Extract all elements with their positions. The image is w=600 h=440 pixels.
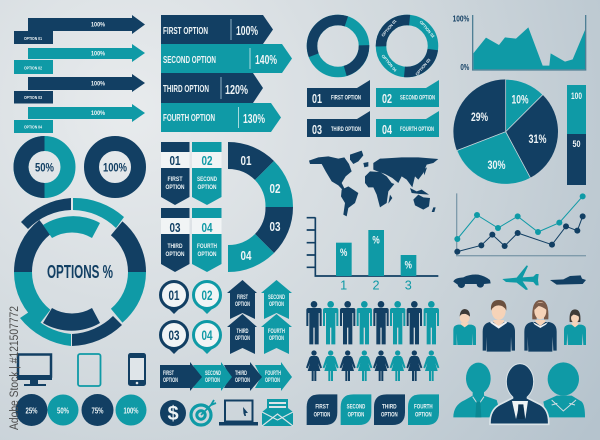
icon: phone xyxy=(128,353,146,386)
area chart: 100% xyxy=(453,14,469,23)
row of men xyxy=(306,301,439,344)
ring chart: with option labels: OPTION 02 xyxy=(419,19,436,39)
second option bar xyxy=(161,44,292,73)
first option bar: FIRST OPTION xyxy=(163,26,208,37)
icon: target xyxy=(191,400,216,425)
upward arrow banners: SECOND xyxy=(268,295,285,301)
arrow option 4: 100% xyxy=(91,111,106,117)
people pictograms xyxy=(306,300,586,425)
tag 04: OPTION xyxy=(198,251,217,258)
leaf labels: OPTION xyxy=(314,411,330,418)
flag labels 01-04 xyxy=(307,80,439,137)
upward arrow banners: FIRST xyxy=(237,295,248,301)
upward arrow banners: OPTION xyxy=(269,302,284,308)
numbered bookmark tags xyxy=(161,142,222,272)
portrait: woman xyxy=(524,300,557,352)
flag labels 01-04: 03 xyxy=(312,122,322,137)
tag 03: 03 xyxy=(170,220,180,235)
leaf labels: FIRST xyxy=(315,403,329,410)
tag 02: SECOND xyxy=(197,176,217,183)
vertical stacked bar xyxy=(567,85,586,185)
arrow option 4: OPTION 04 xyxy=(24,124,42,130)
vertical stacked bar: 100 xyxy=(571,91,582,101)
half ring segments 01-04 xyxy=(228,142,293,272)
fourth option bar: 130% xyxy=(243,111,265,126)
bar chart: % xyxy=(340,247,347,259)
third option bar xyxy=(161,73,263,103)
tag 01 xyxy=(161,142,190,205)
donut: 50%: 50% xyxy=(35,160,54,174)
ring chart: with option labels xyxy=(380,18,436,77)
chevron process row: OPTION xyxy=(265,378,280,384)
icon: boat xyxy=(550,275,586,285)
panel: arrow options xyxy=(14,15,145,133)
pie chart: 31% xyxy=(528,132,547,146)
icon: dollar xyxy=(160,400,186,426)
watermark: stock id: Adobe Stock | #121507772 xyxy=(9,306,21,430)
half ring segments 01-04: 03 xyxy=(270,219,280,234)
ring title: OPTIONS % xyxy=(47,262,113,282)
large options ring chart xyxy=(14,198,146,346)
percent circles: 25% xyxy=(26,406,38,416)
pie chart: 29% xyxy=(471,110,488,124)
icon: tablet xyxy=(78,354,100,386)
tag 02: 02 xyxy=(202,153,212,168)
arrow option 3: 100% xyxy=(91,82,106,88)
icon: airplane xyxy=(502,265,539,290)
portrait: boy xyxy=(453,309,476,345)
map pins 01-04: 03 xyxy=(168,327,180,343)
pie chart: 30% xyxy=(488,158,506,172)
donut: 100%: 100% xyxy=(103,160,127,174)
silhouette: woman right xyxy=(543,362,585,417)
upward arrow banners: OPTION xyxy=(235,302,250,308)
upward arrow banners: OPTION xyxy=(269,336,284,342)
donut: 50% xyxy=(13,136,68,198)
flag labels 01-04: THIRD OPTION xyxy=(331,127,361,133)
first option bar: 100% xyxy=(236,23,258,38)
ring chart: with option labels: OPTION 01 xyxy=(380,18,398,38)
map pins 01-04: 01 xyxy=(168,287,180,303)
chevron process row xyxy=(160,362,292,391)
flag labels 01-04: FOURTH OPTION xyxy=(400,127,434,133)
second option bar: 140% xyxy=(255,52,277,67)
tag 01: OPTION xyxy=(166,184,185,191)
icon: laptop xyxy=(219,400,258,426)
map pins 01-04: 02 xyxy=(202,287,213,303)
second option bar: SECOND OPTION xyxy=(163,55,216,66)
upward arrow banners: OPTION xyxy=(235,336,250,342)
third option bar: THIRD OPTION xyxy=(163,84,209,95)
chevron process row: THIRD xyxy=(235,371,247,377)
chevron process row: OPTION xyxy=(163,378,178,384)
upward arrow banners: FOURTH xyxy=(268,329,285,335)
tag 01: FIRST xyxy=(168,176,183,183)
bar chart: 2 xyxy=(372,278,380,292)
tag 03 xyxy=(161,208,190,272)
chevron process row: FOURTH xyxy=(265,371,281,377)
portrait: man xyxy=(483,300,515,352)
chevron process row: OPTION xyxy=(235,378,250,384)
icon: desktop monitor xyxy=(17,354,52,386)
portrait: girl xyxy=(564,309,586,345)
tag 04: FOURTH xyxy=(197,243,217,250)
bar chart xyxy=(307,217,438,292)
half ring segments 01-04: 04 xyxy=(240,248,252,263)
leaf labels: OPTION xyxy=(381,411,398,418)
leaf labels: OPTION xyxy=(348,411,364,418)
percent circles: 50% xyxy=(57,406,69,416)
arrow option 3: OPTION 03 xyxy=(24,95,42,100)
vertical stacked bar: 50 xyxy=(572,139,580,149)
pie chart: 10% xyxy=(512,92,529,106)
leaf labels: SECOND xyxy=(347,403,365,410)
row of women xyxy=(306,350,439,381)
bar chart: % xyxy=(405,259,412,271)
arrow option 2 xyxy=(14,44,145,74)
ring chart: with option labels: OPTION 03 xyxy=(414,57,432,77)
flag labels 01-04: 04 xyxy=(382,122,393,137)
third option bar: 120% xyxy=(225,82,248,97)
pie chart xyxy=(453,79,558,184)
bar chart: 3 xyxy=(405,278,412,292)
world map xyxy=(309,151,438,216)
icon: dollar: $ xyxy=(167,403,179,425)
ring chart: plain xyxy=(312,20,364,72)
arrow option 1: 100% xyxy=(91,22,106,28)
half ring segments 01-04: 02 xyxy=(270,181,280,196)
silhouette: man left xyxy=(453,363,502,417)
percent circles xyxy=(16,394,146,426)
bar chart: % xyxy=(372,235,380,247)
tag 01: 01 xyxy=(170,153,180,168)
chevron process row: SECOND xyxy=(205,371,221,377)
icon: car xyxy=(453,275,491,288)
arrow option 1 xyxy=(14,15,145,44)
tag 03: OPTION xyxy=(166,251,185,258)
half ring segments 01-04: 01 xyxy=(240,153,252,168)
area chart: 0% xyxy=(460,63,469,72)
line chart xyxy=(454,193,586,256)
tag 02 xyxy=(192,142,222,205)
panel: percentage option bars xyxy=(161,15,292,132)
flag labels 01-04: SECOND OPTION xyxy=(400,96,435,102)
leaf labels xyxy=(307,394,439,425)
business silhouettes xyxy=(453,362,585,424)
flag labels 01-04: 01 xyxy=(312,91,322,106)
leaf labels: OPTION xyxy=(415,411,432,418)
ring chart: with option labels: OPTION 04 xyxy=(381,53,398,73)
leaf labels: FOURTH xyxy=(414,403,433,410)
upward arrow banners: THIRD xyxy=(236,329,249,335)
percent circles: 100% xyxy=(124,406,138,416)
tag 04: 04 xyxy=(202,220,213,235)
fourth option bar xyxy=(161,103,281,132)
donut: 100% xyxy=(92,144,138,190)
arrow option 1: OPTION 01 xyxy=(24,36,42,41)
tag 03: THIRD xyxy=(168,243,183,250)
bar chart: 1 xyxy=(340,278,347,292)
silhouette: man centre xyxy=(490,364,549,424)
first option bar xyxy=(161,15,273,44)
tag 02: OPTION xyxy=(198,184,217,191)
arrow option 3 xyxy=(14,74,145,104)
chevron process row: FIRST xyxy=(163,371,174,377)
area chart xyxy=(453,14,586,72)
fourth option bar: FOURTH OPTION xyxy=(163,113,215,124)
tag 04 xyxy=(192,208,222,272)
upward arrow banners xyxy=(227,280,292,354)
arrow option 2: 100% xyxy=(91,52,106,58)
map pins 01-04 xyxy=(160,282,220,354)
flag labels 01-04: 02 xyxy=(382,91,392,106)
map pins 01-04: 04 xyxy=(202,327,213,343)
chevron process row: OPTION xyxy=(205,378,220,384)
percent circles: 75% xyxy=(92,406,104,416)
arrow option 4 xyxy=(14,104,145,133)
leaf labels: THIRD xyxy=(382,403,397,410)
arrow option 2: OPTION 02 xyxy=(24,66,42,70)
icon: envelope xyxy=(262,399,293,426)
flag labels 01-04: FIRST OPTION xyxy=(331,96,361,102)
